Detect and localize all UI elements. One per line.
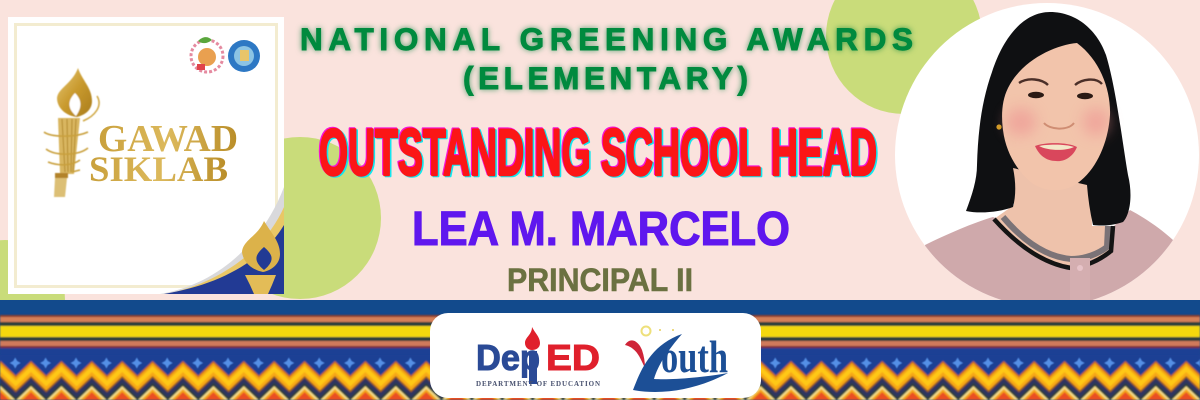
heading: Outstanding School Head bbox=[318, 114, 878, 190]
logo: Youth Formation Division bbox=[625, 326, 728, 392]
neck and chest bbox=[994, 160, 1112, 266]
icon: DepEd torch bbox=[525, 327, 540, 350]
chevrons bbox=[0, 355, 1200, 400]
heading: National Greening Awards bbox=[300, 21, 913, 96]
logo: DepEd bbox=[476, 327, 600, 388]
cheeks bbox=[1006, 108, 1109, 136]
logo wordmark bbox=[90, 126, 236, 182]
decorative woven band bbox=[0, 300, 1200, 400]
logo: DepEd: p bbox=[520, 337, 540, 378]
face bbox=[1002, 43, 1110, 190]
heading: National Greening Awards: NATIONAL GREENING AWARDS bbox=[300, 21, 913, 57]
logo wordmark: GAWAD bbox=[98, 118, 238, 160]
portrait photo bbox=[890, 0, 1200, 320]
hair bbox=[966, 12, 1130, 226]
blouse placket bbox=[1070, 258, 1090, 271]
panel: Gawad Siklab logo card bbox=[8, 17, 284, 294]
icon: golden torch bbox=[44, 68, 99, 197]
corner swoosh with torch bbox=[160, 187, 284, 294]
logo: DepEd: ED bbox=[546, 337, 600, 378]
logo: DepEd: De bbox=[476, 337, 520, 378]
mouth bbox=[1035, 143, 1077, 161]
job title: PRINCIPAL II bbox=[507, 262, 693, 298]
logo: Youth Formation Division: outh bbox=[661, 331, 728, 382]
blouse bbox=[925, 210, 1173, 300]
eyes and brows bbox=[1019, 79, 1102, 99]
collar bbox=[1003, 217, 1108, 259]
name: LEA M. MARCELO bbox=[412, 203, 790, 256]
earring bbox=[996, 124, 1002, 130]
logo: DepEd: DEPARTMENT OF EDUCATION bbox=[476, 380, 600, 388]
seal logos bbox=[191, 37, 260, 72]
logo wordmark: SIKLAB bbox=[89, 149, 228, 189]
stripes bbox=[0, 315, 1200, 360]
panel: logo pill bbox=[430, 313, 761, 398]
heading: National Greening Awards: (ELEMENTARY) bbox=[463, 60, 748, 96]
star row bbox=[0, 356, 1200, 370]
nose bbox=[1044, 123, 1074, 129]
green decorative circles bbox=[0, 0, 982, 360]
